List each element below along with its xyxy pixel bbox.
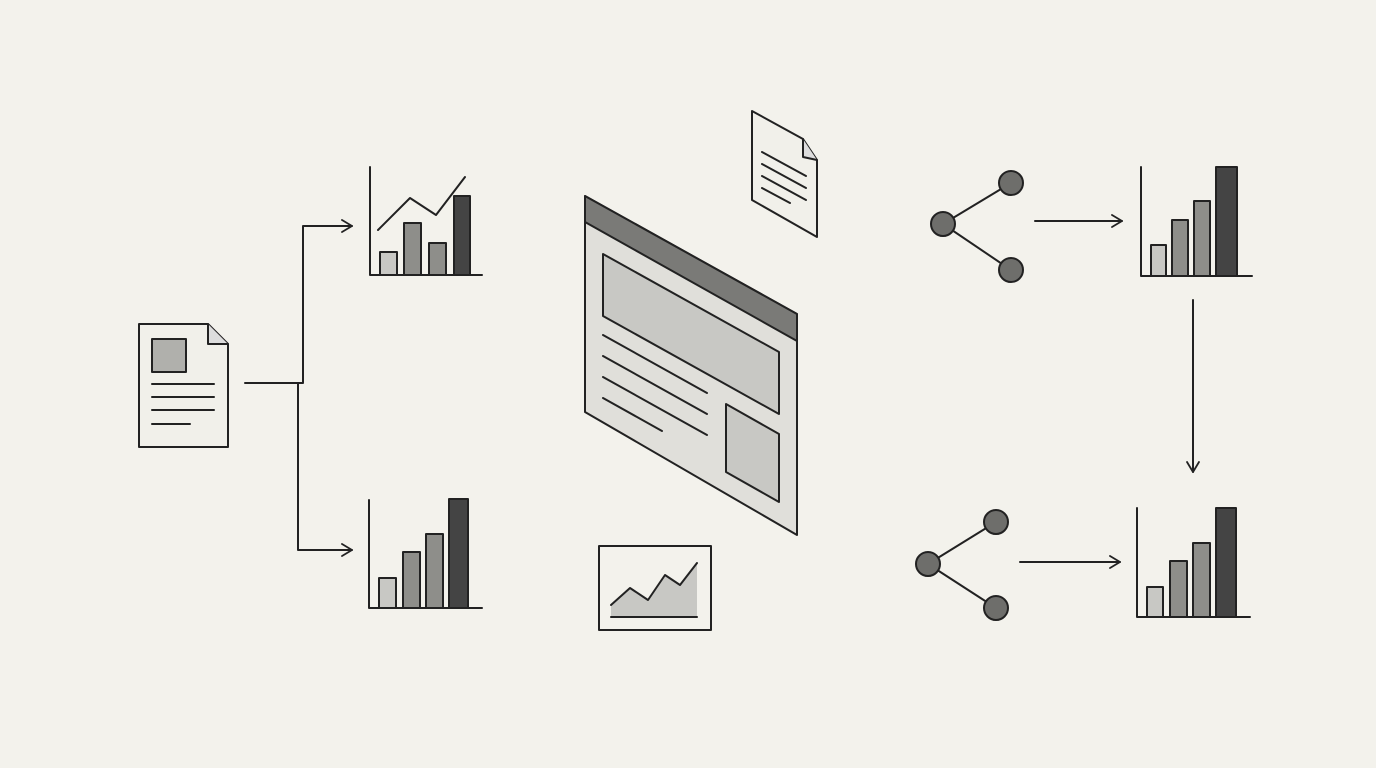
icon: share nodes top xyxy=(931,171,1023,282)
arrow: bottom right xyxy=(1020,561,1120,563)
icon: area chart card xyxy=(599,546,711,630)
arrow: down xyxy=(1192,300,1194,472)
icon: isometric browser window xyxy=(585,196,797,535)
icon: share nodes bottom xyxy=(916,510,1008,620)
arrow: top right xyxy=(1035,220,1122,222)
chart: top left bars with line xyxy=(370,167,482,275)
icon: source document xyxy=(139,324,228,447)
chart: top right bars xyxy=(1141,167,1252,276)
arrow: split connector xyxy=(245,226,352,550)
chart: bottom left bars xyxy=(369,499,482,608)
chart: bottom right bars xyxy=(1137,508,1250,617)
icon: floating document xyxy=(752,111,817,237)
